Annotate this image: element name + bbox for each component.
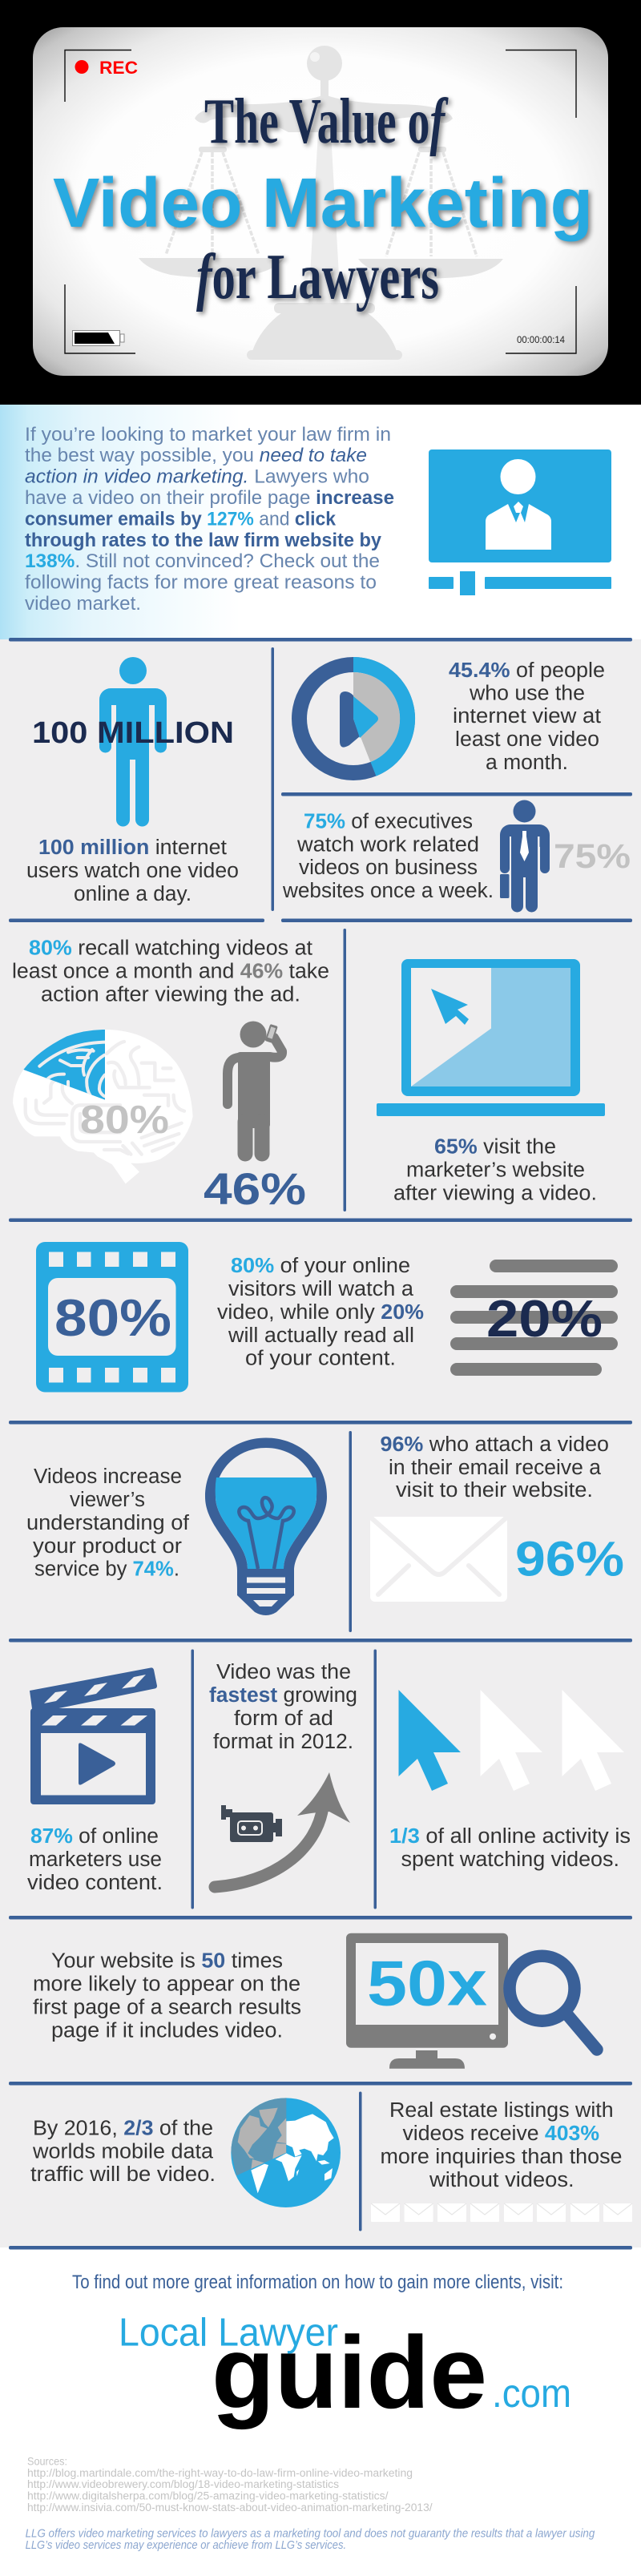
caption: 96% who attach a video: [380, 1433, 609, 1456]
panel: 75 percent executives: [282, 800, 631, 906]
panel: footer: [26, 2272, 595, 2552]
intro text: action in video marketing. Lawyers who: [25, 466, 369, 488]
icon: film frame: [36, 1242, 188, 1393]
caption: 45.4% of people: [449, 659, 605, 682]
panel: 2016 mobile data: [30, 2098, 341, 2207]
caption: Videos increase: [34, 1465, 182, 1488]
intro text: following facts for more great reasons to: [25, 572, 377, 594]
caption: fastest growing: [209, 1684, 357, 1707]
icon: monitor: [346, 1933, 508, 2069]
caption: By 2016, 2/3 of the: [33, 2118, 213, 2140]
icon: film frame: 80%: [54, 1288, 171, 1347]
panel: 100 million: [26, 657, 239, 905]
icon: ghost scales of justice: [139, 46, 503, 360]
icon: row of envelopes: [371, 2203, 632, 2222]
caption: [209, 1661, 357, 1753]
big number: 100 MILLION: [32, 716, 234, 750]
caption: 80% recall watching videos at: [29, 937, 312, 960]
panel: 65 percent: [377, 959, 605, 1204]
icon: executive: [500, 800, 550, 906]
panel: 87 percent marketers: [27, 1667, 163, 1894]
sources: Sources:: [27, 2456, 67, 2468]
icon: record dot: [75, 60, 88, 74]
timecode: 00:00:00:14: [517, 336, 566, 345]
sources: [27, 2456, 433, 2514]
panel: 45.4 percent: [292, 657, 605, 780]
icon: person on phone: [228, 1021, 282, 1154]
caption: more likely to appear on the: [33, 1973, 300, 1996]
caption: 87% of online: [30, 1825, 159, 1848]
intro text: the best way possible, you need to take: [25, 445, 367, 466]
caption: [217, 1255, 424, 1370]
caption: internet view at: [453, 705, 601, 728]
caption: [26, 1465, 190, 1581]
caption: least one video: [455, 728, 599, 751]
caption: form of ad: [234, 1707, 333, 1730]
intro text: If you’re looking to market your law firm in: [25, 424, 391, 445]
REC label: REC: [99, 58, 138, 78]
title: [53, 87, 593, 312]
icon: text lines: 20%: [486, 1289, 603, 1348]
sources: http://www.videobrewery.com/blog/18-video-marketing-statistics: [27, 2478, 339, 2490]
panel: recall 80 and 46 percent: [12, 937, 329, 1214]
disclaimer: LLG’s video services may experience or achieve from LLG’s services.: [26, 2539, 346, 2552]
icon: envelope: [370, 1517, 507, 1602]
logo: guide: [212, 2316, 487, 2430]
caption: action after viewing the ad.: [41, 984, 300, 1006]
icon: cursors: [399, 1690, 624, 1791]
caption: 80% of your online: [231, 1255, 410, 1277]
caption: websites once a week.: [282, 880, 494, 902]
intro text: 138%. Still not convinced? Check out the: [25, 550, 380, 572]
intro text: [25, 424, 394, 615]
caption: spent watching videos.: [401, 1848, 619, 1871]
sources: http://blog.martindale.com/the-right-way-to-do-law-firm-online-video-marketing: [27, 2467, 413, 2479]
logo: .com: [492, 2371, 571, 2416]
caption: [12, 937, 329, 1006]
caption: least once a month and 46% take: [12, 960, 329, 982]
caption: 100 million internet: [38, 836, 227, 859]
panel: header camera viewfinder: [0, 0, 641, 405]
viewfinder corner marks: [65, 50, 576, 353]
panel: real estate: [371, 2099, 632, 2222]
disclaimer: LLG offers video marketing services to lawyers as a marketing tool and does not guaranty the results that a lawyer using: [26, 2528, 595, 2541]
panel: understanding 74 percent: [26, 1437, 327, 1615]
caption: understanding of: [26, 1512, 190, 1534]
icon: brain: [13, 1030, 193, 1183]
caption: marketers use: [29, 1848, 162, 1871]
caption: [380, 1433, 609, 1502]
caption: videos receive 403%: [402, 2122, 599, 2145]
caption: after viewing a video.: [393, 1182, 597, 1204]
intro text: have a video on their profile page increase: [25, 487, 394, 509]
caption: video, while only 20%: [217, 1301, 424, 1324]
caption: [26, 836, 239, 905]
icon: video player with presenter: [429, 449, 611, 595]
caption: [27, 1825, 163, 1894]
big stat: 46%: [204, 1163, 306, 1214]
caption: more inquiries than those: [380, 2146, 622, 2168]
caption: of your content.: [245, 1348, 396, 1370]
title: for Lawyers: [196, 242, 439, 312]
caption: watch work related: [296, 834, 479, 857]
icon: monitor: 50x: [367, 1948, 487, 2019]
caption: traffic will be video.: [30, 2163, 216, 2186]
caption: videos on business: [299, 857, 478, 879]
caption: Real estate listings with: [389, 2099, 614, 2122]
panel: one third of activity: [389, 1690, 631, 1871]
caption: without videos.: [429, 2169, 574, 2191]
caption: 75% of executives: [304, 811, 473, 833]
call to action: To find out more great information on how to gain more clients, visit:: [72, 2272, 563, 2293]
divider rules: [9, 638, 632, 2250]
big stat: 96%: [515, 1532, 624, 1586]
caption: Video was the: [216, 1661, 351, 1683]
brain stat: 80%: [80, 1099, 169, 1142]
intro text: video market.: [25, 593, 141, 615]
caption: in their email receive a: [389, 1457, 602, 1479]
title: Video Marketing: [53, 164, 593, 242]
caption: 1/3 of all online activity is: [389, 1825, 631, 1848]
arrow: growth: [215, 1772, 350, 1887]
caption: users watch one video: [26, 860, 239, 882]
caption: [393, 1135, 597, 1204]
caption: [282, 811, 494, 902]
icon: globe: [230, 2098, 341, 2207]
icon: laptop: [377, 959, 605, 1116]
icon: magnifier: [510, 1956, 597, 2050]
icon: text lines: [450, 1260, 618, 1376]
caption: viewer’s: [70, 1489, 145, 1511]
caption: format in 2012.: [213, 1731, 353, 1753]
caption: [449, 659, 605, 774]
panel: 50 times: [33, 1933, 597, 2069]
icon: person: [99, 657, 167, 820]
caption: service by 74%.: [34, 1558, 179, 1581]
caption: visitors will watch a: [228, 1278, 414, 1300]
icon: battery: [72, 330, 124, 346]
panel: intro: [0, 405, 611, 639]
caption: your product or: [33, 1535, 183, 1558]
panel: fastest growing: [209, 1661, 357, 1887]
title: The Value of: [204, 87, 449, 157]
caption: 65% visit the: [434, 1135, 556, 1158]
caption: a month.: [486, 752, 568, 774]
caption: will actually read all: [228, 1324, 414, 1347]
logo: [119, 2312, 571, 2430]
logo: Local Lawyer: [119, 2312, 338, 2355]
caption: visit to their website.: [396, 1479, 593, 1502]
panel: 96 percent email: [370, 1433, 624, 1602]
caption: [380, 2099, 622, 2191]
icon: clapperboard: [30, 1667, 157, 1804]
icon: video camera: [221, 1805, 282, 1842]
caption: worlds mobile data: [32, 2141, 214, 2163]
caption: online a day.: [74, 883, 191, 905]
caption: [33, 1950, 301, 2042]
panel: 80 percent watch, 20 percent read: [36, 1242, 618, 1393]
disclaimer: [26, 2528, 595, 2552]
caption: Your website is 50 times: [51, 1950, 283, 1973]
caption: who use the: [469, 683, 585, 705]
icon: play donut chart: [292, 657, 415, 780]
icon: light bulb: [205, 1437, 327, 1615]
intro text: through rates to the law firm website by: [25, 530, 382, 551]
caption: [389, 1825, 631, 1871]
caption: first page of a search results: [33, 1997, 301, 2019]
sources: http://www.insivia.com/50-must-know-stats-about-video-animation-marketing-2013/: [27, 2501, 433, 2514]
caption: video content.: [27, 1872, 163, 1894]
intro text: consumer emails by 127% and click: [25, 508, 337, 530]
caption: marketer’s website: [406, 1159, 585, 1181]
viewfinder screen: [33, 27, 608, 376]
gray stat: 75%: [554, 837, 631, 876]
caption: page if it includes video.: [51, 2020, 283, 2042]
caption: [30, 2118, 216, 2186]
sources: http://www.digitalsherpa.com/blog/25-amazing-video-marketing-statistics/: [27, 2490, 389, 2502]
